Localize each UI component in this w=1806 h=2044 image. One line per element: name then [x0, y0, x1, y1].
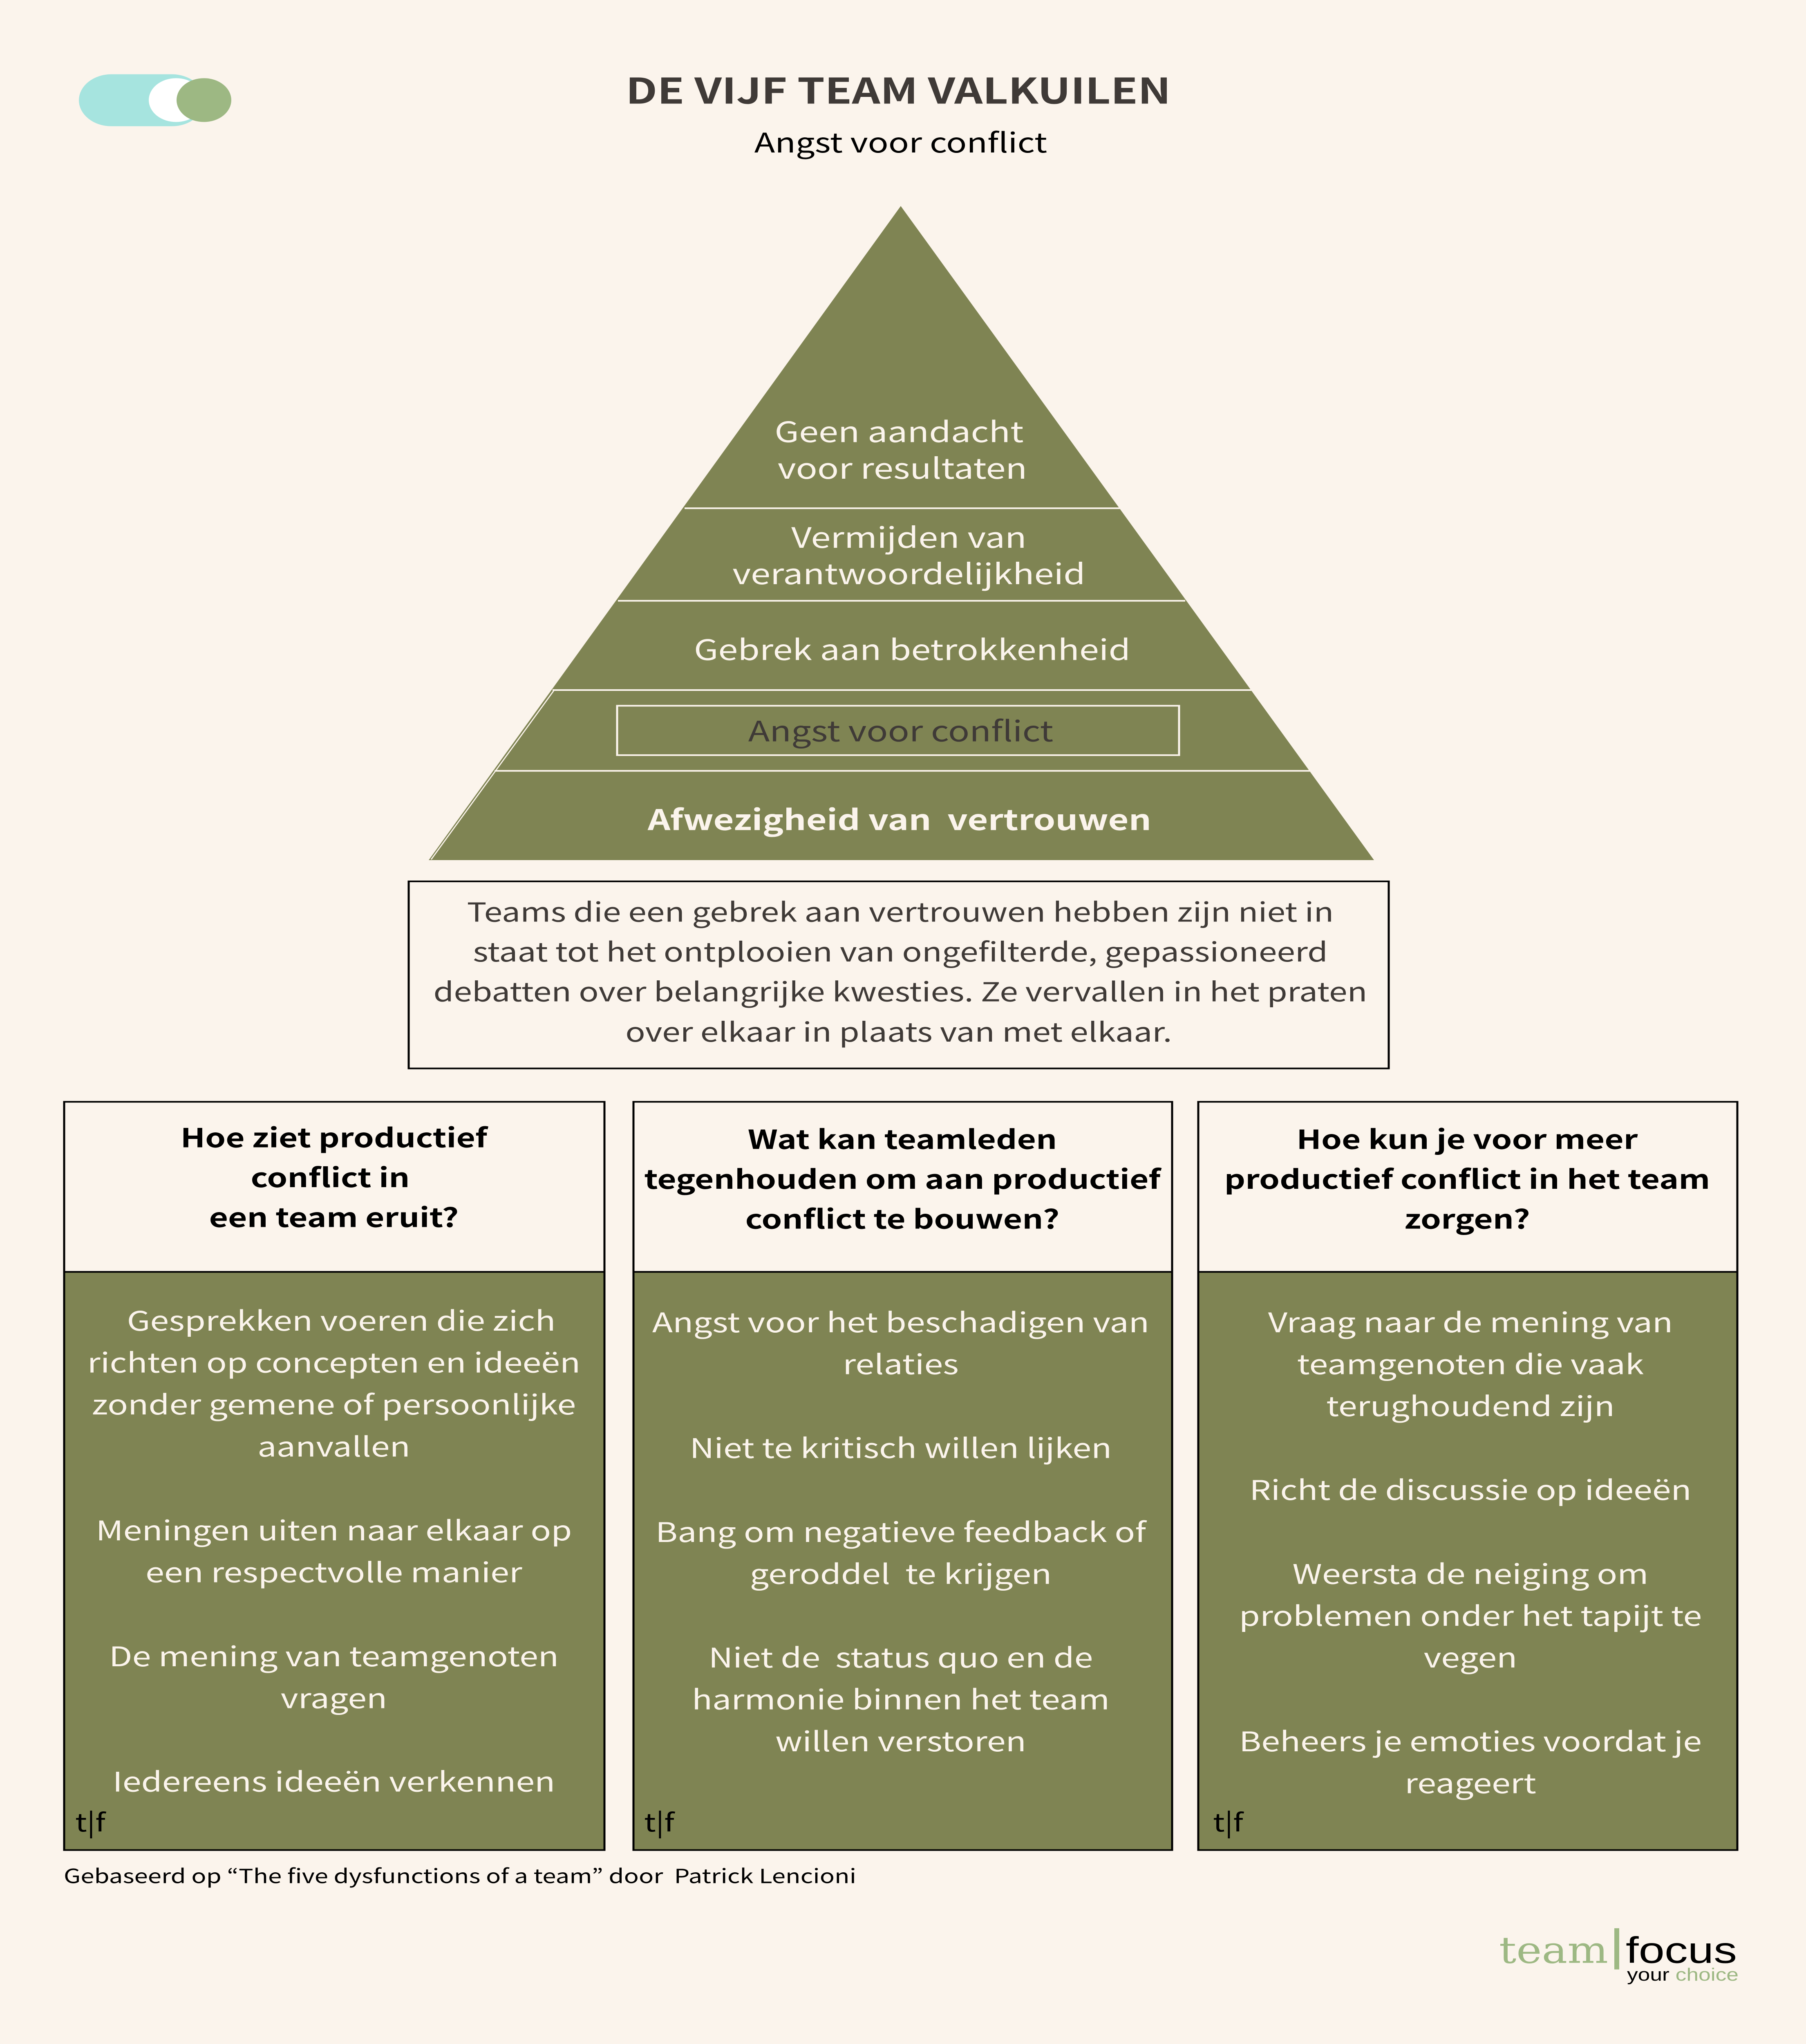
logo: team focus: team	[1499, 1929, 1608, 1972]
heading: column 2	[644, 1118, 1162, 1236]
panel: explanation: over elkaar in plaats van met elkaar.	[625, 1011, 1172, 1049]
text: column 2 item 4: harmonie binnen het team	[692, 1678, 1110, 1717]
panel: explanation: Teams die een gebrek aan vertrouwen hebben zijn niet in	[467, 891, 1334, 929]
heading: column 3: productief conflict in het team	[1224, 1159, 1710, 1197]
level: vermijden van verantwoordelijkheid	[732, 515, 1085, 592]
text: column 2 item 1: Angst voor het beschadigen van	[652, 1301, 1149, 1340]
text: column 3 item 3: vegen	[1424, 1636, 1517, 1676]
level: vermijden van verantwoordelijkheid: Vermijden van	[791, 515, 1027, 556]
heading: column 1: conflict in	[251, 1157, 410, 1195]
level: gebrek aan betrokkenheid: Gebrek aan betrokkenheid	[694, 627, 1130, 668]
text: column 3 item 1: teamgenoten die vaak	[1297, 1343, 1644, 1382]
level: angst voor conflict highlight	[617, 706, 1179, 755]
pyramid dividers	[495, 508, 1310, 771]
text: column 1 item 1: richten op concepten en ideeën	[87, 1341, 580, 1381]
text: column 2 item 3: geroddel te krijgen	[750, 1553, 1052, 1592]
text: column 2 item 1: relaties	[843, 1343, 959, 1382]
level: angst voor conflict highlight: Angst voor conflict	[748, 708, 1053, 750]
text: column 3 item 1	[1268, 1301, 1673, 1424]
level: geen aandacht voor resultaten	[774, 409, 1027, 487]
title: DE VIJF TEAM VALKUILEN	[626, 63, 1171, 114]
text: column 1 item 3: vragen	[281, 1677, 387, 1716]
mark: t|f: t|f	[644, 1802, 676, 1839]
heading: column 3	[1224, 1118, 1710, 1236]
heading: column 2: conflict te bouwen?	[745, 1198, 1059, 1236]
text: column 2 item 3	[656, 1511, 1147, 1592]
text: column 3 item 1: Vraag naar de mening van	[1268, 1301, 1673, 1340]
heading: column 1: een team eruit?	[209, 1197, 459, 1235]
heading: column 1: Hoe ziet productief	[181, 1117, 489, 1155]
panel: explanation: staat tot het ontplooien van ongefilterde, gepassioneerd	[473, 931, 1328, 969]
heading: column 2: Wat kan teamleden	[748, 1118, 1057, 1156]
text: column 1 item 4: Iedereens ideeën verkennen	[113, 1760, 555, 1800]
text: column 1 item 2: Meningen uiten naar elkaar op	[96, 1509, 572, 1548]
level: geen aandacht voor resultaten: Geen aandacht	[774, 409, 1024, 450]
mark: t|f: t|f	[75, 1802, 107, 1839]
text: column 3 item 2: Richt de discussie op ideeën	[1249, 1468, 1692, 1508]
pyramid shape	[429, 206, 1374, 860]
logo: team focus: your choice	[1627, 1965, 1739, 1985]
text: column 3 item 1: terughoudend zijn	[1326, 1385, 1615, 1424]
text: column 3 item 4	[1239, 1720, 1702, 1801]
text: column 3 item 3: Weersta de neiging om	[1292, 1553, 1649, 1592]
mark: t|f: t|f	[1213, 1802, 1244, 1839]
level: geen aandacht voor resultaten: voor resultaten	[778, 446, 1027, 487]
panel: explanation: debatten over belangrijke kwesties. Ze vervallen in het praten	[434, 971, 1367, 1009]
text: column 2 item 2: Niet te kritisch willen lijken	[690, 1427, 1112, 1466]
text: column 1 item 3	[109, 1635, 559, 1716]
heading: column 2: tegenhouden om aan productief	[644, 1159, 1162, 1197]
subtitle: Angst voor conflict	[754, 121, 1047, 160]
text: column 3 item 3: problemen onder het tapijt te	[1239, 1594, 1702, 1634]
logo: team focus	[1499, 1928, 1739, 1985]
heading: column 1	[181, 1117, 489, 1235]
level: afwezigheid van vertrouwen: Afwezigheid van vertrouwen	[647, 797, 1151, 838]
text: column 3 item 3	[1239, 1553, 1702, 1676]
text: column 1 item 2: een respectvolle manier	[145, 1551, 523, 1590]
heading: column 3: zorgen?	[1404, 1198, 1530, 1236]
text: column 3 item 4: Beheers je emoties voordat je	[1239, 1720, 1702, 1759]
text: column 2 item 3: Bang om negatieve feedback of	[656, 1511, 1147, 1550]
icon: toggle	[79, 74, 231, 126]
panel: column 2	[633, 1102, 1172, 1850]
text: column 3 item 4: reageert	[1405, 1762, 1536, 1801]
text: column 2 item 4: Niet de status quo en de	[709, 1636, 1093, 1676]
level: vermijden van verantwoordelijkheid: verantwoordelijkheid	[732, 551, 1085, 592]
panel: explanation	[409, 881, 1389, 1069]
text: column 1 item 1: Gesprekken voeren die zich	[127, 1299, 555, 1339]
panel: column 3	[1198, 1102, 1737, 1850]
text: column 2 item 4	[692, 1636, 1110, 1759]
text: column 2 item 4: willen verstoren	[775, 1720, 1026, 1759]
text: column 1 item 3: De mening van teamgenoten	[109, 1635, 559, 1674]
text: column 2 item 1	[652, 1301, 1149, 1382]
heading: column 3: Hoe kun je voor meer	[1296, 1118, 1638, 1156]
panel: column 1	[64, 1102, 604, 1850]
text: column 1 item 1	[87, 1299, 580, 1465]
text: column 1 item 1: zonder gemene of persoonlijke	[92, 1383, 576, 1422]
text: column 1 item 2	[96, 1509, 572, 1590]
logo: team focus: focus	[1626, 1930, 1737, 1971]
pyramid	[429, 206, 1374, 860]
source note: Gebaseerd op “The five dysfunctions of a team” door Patrick Lencioni	[64, 1860, 856, 1889]
text: column 1 item 1: aanvallen	[257, 1425, 410, 1465]
